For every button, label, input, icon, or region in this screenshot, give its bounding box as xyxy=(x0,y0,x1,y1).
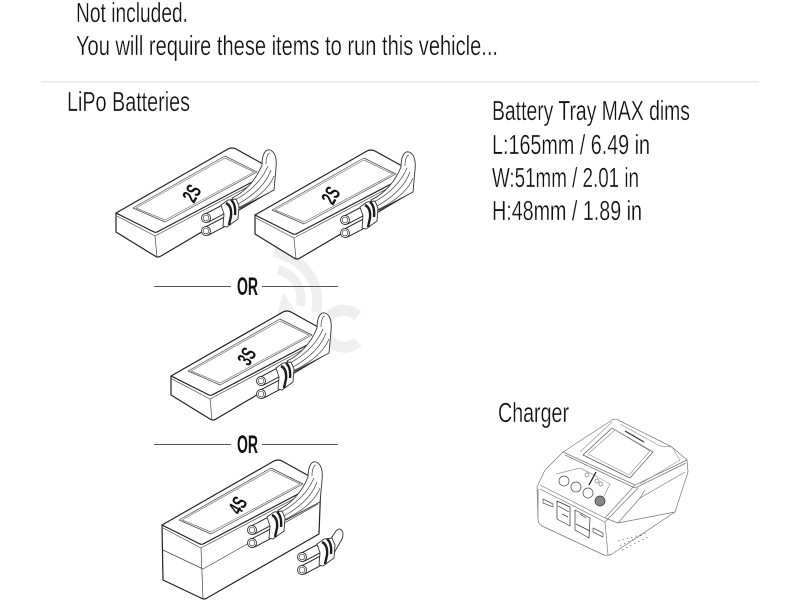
text block: battery tray max dimensions: L:165mm / 6.49 in xyxy=(492,129,650,160)
heading: charger: Charger xyxy=(498,397,569,428)
heading: LiPo batteries: LiPo Batteries xyxy=(67,86,190,117)
text block: battery tray max dimensions: W:51mm / 2.01 in xyxy=(492,162,639,193)
battery: 2S right: 2S xyxy=(316,182,345,208)
battery: 4S: 4S xyxy=(223,492,252,518)
battery: 4S xyxy=(162,460,322,599)
divider: or: OR xyxy=(237,431,258,459)
battery: 2S left: 2S xyxy=(177,180,206,206)
battery: 2S left xyxy=(116,148,276,257)
text block: battery tray max dimensions: H:48mm / 1.89 in xyxy=(492,195,642,226)
icon: charger xyxy=(537,419,688,555)
battery: 2S right xyxy=(255,150,415,259)
battery: 3S: 3S xyxy=(232,343,261,369)
heading: required items: You will require these items to run this vehicle... xyxy=(76,30,498,61)
icon: spare connector xyxy=(298,529,343,574)
watermark logo xyxy=(268,252,358,354)
text block: battery tray max dimensions: Battery Tray MAX dims xyxy=(492,95,690,126)
battery: 3S xyxy=(171,311,331,420)
text block: battery tray max dimensions xyxy=(492,95,690,226)
divider: or: OR xyxy=(237,273,258,301)
